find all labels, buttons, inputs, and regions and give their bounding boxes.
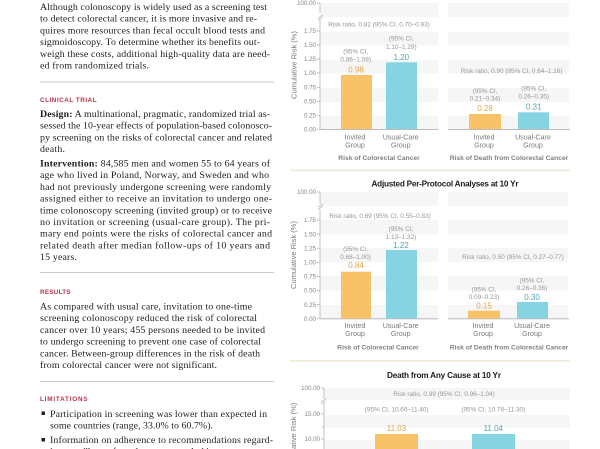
chart: death from any cause: (95% CI, 10.78–11.30) — [461, 406, 525, 414]
chart: risk of death from colorectal cancer, intention to screen: Group — [474, 142, 494, 150]
chart: risk of colorectal cancer, intention to screen: 0.25 — [304, 112, 317, 120]
text block: results: screening colonoscopy reduced the risk of colorectal — [40, 313, 257, 324]
chart: risk of colorectal cancer, per-protocol: 1.75 — [304, 217, 317, 224]
chart: risk of colorectal cancer, per-protocol: 0.68–1.00) — [340, 254, 371, 261]
chart: death from any cause: 11.04 — [484, 424, 504, 433]
heading: clinical trial: CLINICAL TRIAL — [40, 97, 97, 104]
text block: background: weigh these costs, additional high-quality data are need- — [40, 49, 270, 60]
chart: risk of death from colorectal cancer, intention to screen: 0.31 — [526, 102, 542, 112]
text block: intervention: mary end points were the risks of colorectal cancer and — [40, 229, 272, 240]
chart: risk of colorectal cancer, per-protocol: 0.50 — [304, 288, 317, 295]
chart: risk of death from colorectal cancer, per-protocol: Risk ratio, 0.50 (95% CI, 0.27–0.77) — [462, 254, 564, 261]
chart: risk of colorectal cancer, per-protocol: 1.00 — [304, 260, 317, 266]
list: limitations: some countries (range, 33.0% to 60.7%). — [50, 421, 213, 432]
chart: risk of colorectal cancer, per-protocol: 1.25 — [304, 245, 317, 252]
chart: risk of colorectal cancer, intention to screen: 1.25 — [304, 56, 317, 63]
chart: risk of colorectal cancer, per-protocol — [289, 189, 438, 352]
chart: risk of colorectal cancer, per-protocol: 0.25 — [304, 302, 317, 309]
chart: risk of colorectal cancer, per-protocol: Risk ratio, 0.69 (95% CI, 0.55–0.83) — [329, 213, 431, 220]
text block: results — [40, 302, 265, 371]
chart: risk of death from colorectal cancer, intention to screen — [448, 3, 570, 162]
list: limitations: Participation in screening was lower than expected in — [50, 409, 267, 420]
chart: risk of death from colorectal cancer, per-protocol: 0.09–0.23) — [469, 294, 499, 301]
chart: risk of death from colorectal cancer, per-protocol: (95% CI, — [520, 278, 545, 284]
chart: risk of colorectal cancer, intention to screen: Cumulative Risk (%) — [290, 31, 298, 99]
heading: results: RESULTS — [40, 289, 71, 296]
text block: results: cancer. Between-group differences in the risk of death — [40, 348, 260, 359]
text block: background: sigmoidoscopy. To determine whether its benefits out- — [40, 37, 260, 48]
chart: risk of colorectal cancer, intention to screen: 0.50 — [304, 98, 317, 106]
chart: risk of death from colorectal cancer, intention to screen: 0.28 — [477, 104, 493, 113]
chart: risk of death from colorectal cancer, intention to screen: (95% CI, — [521, 86, 546, 92]
chart: risk of death from colorectal cancer, intention to screen: Usual-Care — [515, 134, 551, 142]
chart: risk of death from colorectal cancer, intention to screen: (95% CI, — [473, 88, 498, 95]
text block: intervention: time colonoscopy screening (invited group) or to receive — [40, 205, 273, 216]
chart: risk of death from colorectal cancer, intention to screen: 0.26–0.35) — [518, 94, 549, 100]
text block: design: py screening on the risks of colorectal cancer and related — [40, 132, 272, 143]
text block: results: to undergo screening to prevent one case of colorectal — [40, 337, 261, 348]
chart: risk of colorectal cancer, intention to screen: 1.50 — [304, 42, 317, 49]
chart: risk of colorectal cancer, intention to screen — [290, 0, 438, 162]
chart: risk of colorectal cancer, intention to screen: Usual-Care — [383, 134, 419, 142]
chart: risk of colorectal cancer, intention to screen: (95% CI, — [343, 48, 368, 56]
chart: death from any cause: 11.03 — [387, 424, 407, 433]
heading: adjusted per-protocol analyses: Adjusted Per-Protocol Analyses at 10 Yr — [372, 180, 519, 188]
chart: death from any cause: 15.00 — [305, 411, 321, 418]
text block: background: to detect colorectal cancer, it is more invasive and re- — [40, 14, 257, 25]
chart: risk of colorectal cancer, per-protocol: Group — [391, 330, 411, 338]
text block: background: quires more resources than fecal occult blood tests and — [40, 25, 265, 36]
chart: risk of colorectal cancer, intention to screen: 0.75 — [304, 84, 317, 92]
list: limitations — [42, 409, 273, 449]
heading: limitations: LIMITATIONS — [40, 396, 88, 403]
chart: risk of colorectal cancer, per-protocol: Usual-Care — [383, 322, 419, 330]
text block: background: ed from randomized trials. — [40, 60, 149, 72]
chart: risk of colorectal cancer, per-protocol: 1.13–1.32) — [386, 234, 416, 241]
list: limitations: Information on adherence to recommendations regard- — [50, 435, 273, 446]
text block: results: As compared with usual care, invitation to one-time — [40, 302, 253, 312]
text block: results: from colorectal cancer were not significant. — [40, 360, 217, 371]
chart: risk of colorectal cancer, per-protocol: 0.75 — [304, 274, 317, 281]
chart: death from any cause: Risk ratio, 0.99 (95% CI, 0.96–1.04) — [393, 391, 495, 398]
chart: risk of death from colorectal cancer, intention to screen: Group — [523, 142, 543, 150]
chart: risk of death from colorectal cancer, intention to screen: 0.21–0.34) — [470, 96, 500, 102]
text block: design — [40, 109, 272, 155]
chart: risk of colorectal cancer, per-protocol: 100.00 — [297, 189, 317, 196]
text block: intervention: Intervention: 84,585 men and women 55 to 64 years of — [40, 158, 271, 170]
chart: risk of colorectal cancer, per-protocol: 1.50 — [304, 231, 317, 238]
chart: risk of colorectal cancer, per-protocol: Invited — [345, 322, 366, 330]
chart: risk of colorectal cancer, intention to screen: Risk ratio, 0.82 (95% CI, 0.70–0.93) — [328, 22, 430, 28]
chart: risk of death from colorectal cancer, per-protocol: 0.26–0.36) — [517, 285, 547, 292]
text block: design: Design: A multinational, pragmatic, randomized trial as- — [40, 109, 270, 120]
chart: risk of death from colorectal cancer, per-protocol — [448, 192, 569, 352]
chart: death from any cause: 100.00 — [301, 385, 321, 392]
chart: risk of colorectal cancer, per-protocol: Cumulative Risk (%) — [289, 221, 298, 289]
chart: risk of death from colorectal cancer, intention to screen: Risk ratio, 0.90 (95% CI, 0.64–1.16) — [461, 68, 562, 75]
heading: death from any cause: Death from Any Cause at 10 Yr — [387, 371, 502, 380]
chart: risk of colorectal cancer, intention to screen: (95% CI, — [389, 36, 414, 42]
chart: risk of colorectal cancer, per-protocol: (95% CI, — [389, 226, 414, 233]
chart: risk of colorectal cancer, intention to screen: 100.00 — [297, 0, 317, 7]
chart: risk of colorectal cancer, intention to screen: 1.00 — [304, 70, 317, 77]
text block: design: sessed the 10-year effects of population-based colonosco- — [40, 121, 272, 132]
text block: intervention: age who lived in Poland, Norway, and Sweden and who — [40, 170, 269, 181]
chart: risk of colorectal cancer, intention to screen: 1.75 — [304, 28, 317, 35]
chart: risk of death from colorectal cancer, per-protocol: 0.30 — [524, 293, 540, 302]
chart: risk of colorectal cancer, intention to screen: 1.10–1.29) — [386, 44, 417, 51]
text block: intervention — [40, 158, 273, 263]
chart: risk of colorectal cancer, intention to screen: 1.20 — [394, 53, 410, 62]
chart: death from any cause: ative Risk (%) — [289, 402, 298, 449]
chart: risk of colorectal cancer, per-protocol: Group — [345, 330, 365, 338]
chart: risk of colorectal cancer, intention to screen: Group — [391, 142, 411, 150]
chart: risk of colorectal cancer, per-protocol: 0.00 — [304, 316, 317, 323]
chart: risk of colorectal cancer, intention to screen: Invited — [345, 134, 366, 142]
chart: risk of colorectal cancer, intention to screen: 0.86–1.09) — [340, 56, 371, 64]
text block: intervention: 15 years. — [40, 252, 77, 263]
chart: death from any cause — [289, 385, 570, 449]
chart: risk of colorectal cancer, intention to screen: Group — [345, 142, 365, 150]
chart: risk of death from colorectal cancer, per-protocol: 0.15 — [476, 302, 492, 310]
text block: intervention: had not previously undergone screening were randomly — [40, 182, 271, 193]
chart: risk of colorectal cancer, per-protocol: Risk of Colorectal Cancer — [337, 344, 419, 352]
chart: risk of death from colorectal cancer, intention to screen: Invited — [474, 134, 495, 142]
chart: risk of colorectal cancer, intention to screen: 0.00 — [304, 126, 317, 134]
chart: risk of death from colorectal cancer, per-protocol: (95% CI, — [472, 286, 497, 294]
chart: risk of colorectal cancer, per-protocol: (95% CI, — [343, 246, 368, 253]
chart: risk of death from colorectal cancer, per-protocol: Invited — [473, 322, 494, 330]
chart: risk of death from colorectal cancer, per-protocol: Risk of Death from Colorectal Cancer — [450, 344, 569, 352]
text block: intervention: related death after median follow-ups of 10 years and — [40, 240, 270, 251]
chart: risk of death from colorectal cancer, per-protocol: Group — [522, 330, 542, 338]
chart: risk of death from colorectal cancer, per-protocol: Usual-Care — [514, 322, 550, 330]
text block: intervention: no invitation or screening (usual-care group). The pri- — [40, 217, 270, 228]
chart: death from any cause: 10.00 — [305, 436, 321, 443]
text block: results: cancer over 10 years; 455 persons needed to be invited — [40, 325, 265, 336]
text block: background: Although colonoscopy is widely used as a screening test — [40, 2, 267, 13]
chart: risk of death from colorectal cancer, per-protocol: Group — [473, 330, 493, 338]
chart: risk of death from colorectal cancer, intention to screen: Risk of Death from Colorectal Cancer — [450, 155, 569, 162]
chart: risk of colorectal cancer, intention to screen: 0.98 — [348, 66, 364, 74]
chart: risk of colorectal cancer, per-protocol: 0.84 — [348, 261, 364, 270]
text block: design: death. — [40, 144, 65, 155]
text block: intervention: assigned either to receive an invitation to undergo one- — [40, 194, 272, 205]
chart: death from any cause: (95% CI, 10.66–11.40) — [365, 406, 429, 414]
chart: risk of colorectal cancer, intention to screen: Risk of Colorectal Cancer — [338, 155, 420, 162]
chart: risk of colorectal cancer, per-protocol: 1.22 — [393, 241, 409, 250]
text block: background — [40, 2, 270, 72]
